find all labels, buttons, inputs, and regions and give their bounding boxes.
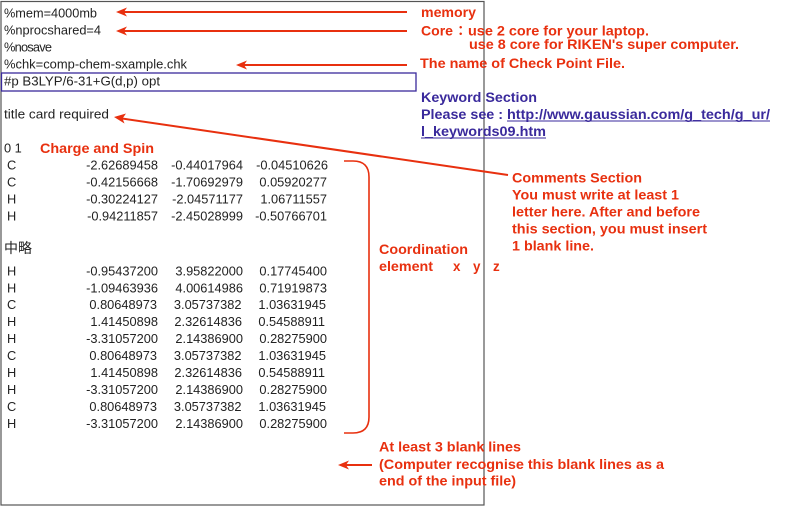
table: coordinates, second block: 0.80648973 <box>89 399 157 414</box>
table: coordinates, second block: H <box>7 280 16 296</box>
table: coordinates, second block: 2.14386900 <box>175 331 243 346</box>
label: keyword section: http://www.gaussian.com/g_tech/g_ur/ <box>507 107 770 122</box>
label: keyword section: Please see : <box>421 107 503 122</box>
label: coordination element: element <box>379 259 434 274</box>
table: coordinates, second block: H <box>7 382 16 397</box>
table: coordinates, second block: -3.31057200 <box>86 382 158 397</box>
table: coordinates, second block: H <box>7 314 16 329</box>
table: coordinates, first block <box>7 158 328 224</box>
label: comments section <box>512 170 708 254</box>
table: coordinates, second block: 0.71919873 <box>259 280 327 296</box>
table: coordinates, first block: -0.94211857 <box>87 208 158 224</box>
panel: input file frame <box>1 2 484 505</box>
table: coordinates, first block: -2.62689458 <box>86 158 158 172</box>
table: coordinates, second block: -1.09463936 <box>86 280 158 296</box>
label: blank lines: At least 3 blank lines <box>379 440 521 454</box>
table: coordinates, second block: 0.80648973 <box>89 348 157 363</box>
table: coordinates, second block: 0.28275900 <box>259 382 327 397</box>
table: coordinates, second block: H <box>7 331 16 346</box>
label: comments section: Comments Section <box>512 170 642 186</box>
table: coordinates, second block <box>7 264 327 431</box>
label: blank lines <box>379 440 665 488</box>
label: comments section: this section, you must insert <box>512 222 708 236</box>
table: coordinates, second block: 2.14386900 <box>175 382 243 397</box>
label: core <box>421 24 739 52</box>
table: coordinates, first block: C <box>7 174 16 190</box>
table: coordinates, first block: -0.50766701 <box>255 208 327 224</box>
label: core: use 8 core for RIKEN's super computer. <box>469 37 739 52</box>
text block: link 0 commands <box>4 6 188 72</box>
table: coordinates, second block: -0.95437200 <box>86 264 158 278</box>
text block: link 0 commands: %chk=comp-chem-sxample.chk <box>4 56 188 72</box>
label: coordination element: x <box>453 259 461 274</box>
arrow: end of file blank lines <box>338 460 372 470</box>
table: coordinates, second block: C <box>7 297 16 312</box>
table: coordinates, first block: H <box>7 192 16 206</box>
table: coordinates, first block: -2.45028999 <box>171 208 243 224</box>
text block: link 0 commands: %nosave <box>4 40 52 54</box>
text block: charge and spin values: 0 1 <box>4 140 22 156</box>
table: coordinates, second block: 2.14386900 <box>175 416 243 431</box>
label: check point file: The name of Check Point File. <box>420 56 625 71</box>
label: core: ： <box>454 24 467 38</box>
label: comments section: 1 blank line. <box>512 238 594 254</box>
table: coordinates, second block: H <box>7 365 16 380</box>
panel: keyword line box <box>2 73 416 91</box>
table: coordinates, second block: 3.05737382 <box>174 297 242 312</box>
label: comments section: You must write at least 1 <box>512 188 680 202</box>
table: coordinates, second block: 0.17745400 <box>259 264 327 278</box>
table: coordinates, first block: -1.70692979 <box>171 174 243 190</box>
bracket: coordination block <box>344 161 369 433</box>
heading: charge and spin: Charge and Spin <box>40 141 154 156</box>
arrow: check point file <box>236 60 407 70</box>
arrow: memory <box>116 8 407 16</box>
table: coordinates, second block: 0.28275900 <box>259 416 327 431</box>
label: blank lines: (Computer recognise this blank lines as a <box>379 457 665 472</box>
table: coordinates, second block: H <box>7 264 16 278</box>
label: keyword section <box>421 90 770 139</box>
table: coordinates, first block: -0.30224127 <box>86 192 158 206</box>
text block: omitted marker: 中略 <box>4 240 32 256</box>
table: coordinates, first block: 0.05920277 <box>259 174 327 190</box>
label: core: Core <box>421 24 453 38</box>
arrow: comments section <box>114 114 508 175</box>
label: keyword section: l_keywords09.htm <box>421 124 546 139</box>
label: coordination element: z <box>493 259 500 274</box>
table: coordinates, first block: H <box>7 208 16 224</box>
label: memory: memory <box>421 5 477 20</box>
text block: link 0 commands: %mem=4000mb <box>4 6 97 20</box>
table: coordinates, second block: C <box>7 399 16 414</box>
table: coordinates, second block: 1.03631945 <box>258 399 326 414</box>
table: coordinates, second block: 0.54588911 <box>258 314 325 329</box>
table: coordinates, second block: C <box>7 348 16 363</box>
table: coordinates, first block: C <box>7 158 16 172</box>
text block: route line: #p B3LYP/6-31+G(d,p) opt <box>4 74 160 88</box>
table: coordinates, first block: -2.04571177 <box>172 192 243 206</box>
table: coordinates, second block: H <box>7 416 16 431</box>
label: coordination element <box>379 242 500 274</box>
table: coordinates, second block: 1.03631945 <box>258 297 326 312</box>
table: coordinates, second block: 3.05737382 <box>174 399 242 414</box>
label: coordination element: Coordination <box>379 242 468 257</box>
arrow: core <box>116 26 407 36</box>
label: coordination element: y <box>473 259 481 274</box>
table: coordinates, second block: 1.41450898 <box>90 365 158 380</box>
table: coordinates, first block: -0.42156668 <box>86 174 158 190</box>
text block: link 0 commands: %nprocshared=4 <box>4 22 101 38</box>
table: coordinates, second block: 0.28275900 <box>259 331 327 346</box>
table: coordinates, second block: 1.03631945 <box>258 348 326 363</box>
table: coordinates, second block: 0.54588911 <box>258 365 325 380</box>
table: coordinates, first block: 1.06711557 <box>260 192 327 206</box>
table: coordinates, first block: -0.04510626 <box>256 158 328 172</box>
label: blank lines: end of the input file) <box>379 474 516 488</box>
table: coordinates, second block: 1.41450898 <box>90 314 158 329</box>
table: coordinates, second block: 3.95822000 <box>175 264 243 278</box>
table: coordinates, second block: 2.32614836 <box>174 314 242 329</box>
text block: title card: title card required <box>4 106 109 122</box>
table: coordinates, second block: -3.31057200 <box>86 416 158 431</box>
table: coordinates, second block: 0.80648973 <box>89 297 157 312</box>
table: coordinates, second block: 3.05737382 <box>174 348 242 363</box>
label: core: use 2 core for your laptop. <box>468 24 649 38</box>
label: comments section: letter here. After and before <box>512 204 700 220</box>
table: coordinates, second block: -3.31057200 <box>86 331 158 346</box>
label: keyword section: Keyword Section <box>421 90 537 105</box>
table: coordinates, second block: 4.00614986 <box>175 280 243 296</box>
table: coordinates, first block: -0.44017964 <box>171 158 243 172</box>
table: coordinates, second block: 2.32614836 <box>174 365 242 380</box>
